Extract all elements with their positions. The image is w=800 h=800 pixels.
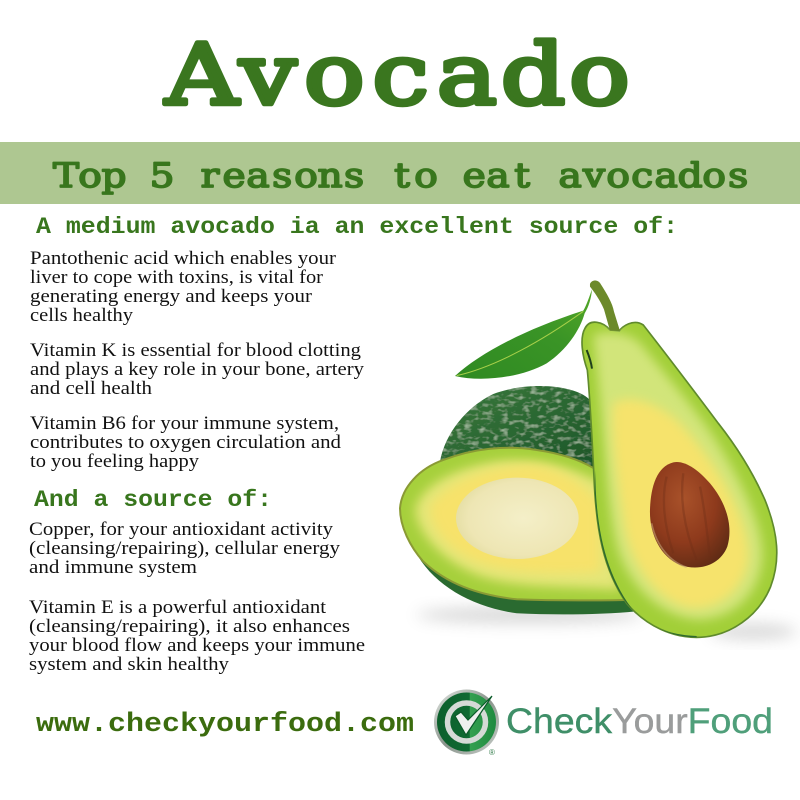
- text block: copper: Copper, for your antioxidant activity: [29, 519, 334, 540]
- logo wordmark: CheckYourFood: [506, 702, 773, 741]
- text block: pantothenic acid: cells healthy: [30, 305, 134, 326]
- heading: excellent source: A medium avocado ia an excellent source of:: [36, 214, 678, 240]
- avocado illustration: [400, 280, 797, 643]
- text block: vitamin E: Vitamin E is a powerful antioxidant: [29, 597, 327, 618]
- text block: vitamin K: and cell health: [30, 378, 153, 399]
- logo: [434, 690, 773, 757]
- left avocado half: [400, 448, 637, 614]
- text block: vitamin E: (cleansing/repairing), it also enhances: [29, 616, 350, 637]
- avocado stem: [590, 280, 620, 331]
- text block: pantothenic acid: generating energy and keeps your: [30, 286, 313, 307]
- text block: vitamin E: [29, 597, 365, 675]
- whole avocado behind: [440, 386, 594, 470]
- subtitle band: [0, 142, 800, 204]
- text block: pantothenic acid: liver to cope with toxins, is vital for: [30, 267, 324, 288]
- text block: vitamin K: Vitamin K is essential for blood clotting: [30, 340, 362, 361]
- text block: vitamin B6: contributes to oxygen circulation and: [30, 432, 342, 453]
- heading: and a source of: And a source of:: [34, 487, 272, 513]
- text block: vitamin B6: to you feeling happy: [30, 451, 200, 472]
- text block: vitamin E: system and skin healthy: [29, 654, 230, 675]
- text block: copper: [29, 519, 341, 578]
- text block: vitamin K: [30, 340, 365, 399]
- logo badge: [434, 690, 499, 754]
- avocado leaf: [455, 289, 592, 379]
- text block: pantothenic acid: Pantothenic acid which enables your: [30, 248, 337, 269]
- text block: vitamin K: and plays a key role in your bone, artery: [30, 359, 365, 380]
- right avocado half: [582, 322, 777, 643]
- footer url: www.checkyourfood.com: [36, 710, 414, 740]
- avocado hollow: [456, 478, 579, 559]
- title: Avocado: [164, 26, 630, 124]
- text block: vitamin B6: [30, 413, 342, 472]
- text block: copper: and immune system: [29, 557, 197, 578]
- ground shadow: [417, 606, 797, 640]
- text block: copper: (cleansing/repairing), cellular energy: [29, 538, 341, 559]
- text block: vitamin B6: Vitamin B6 for your immune system,: [30, 413, 339, 434]
- text block: pantothenic acid: [30, 248, 337, 326]
- avocado pit: [650, 462, 729, 567]
- registered mark: ®: [489, 748, 495, 757]
- subtitle band: Top 5 reasons to eat avocados: [53, 155, 748, 195]
- text block: vitamin E: your blood flow and keeps your immune: [29, 635, 365, 656]
